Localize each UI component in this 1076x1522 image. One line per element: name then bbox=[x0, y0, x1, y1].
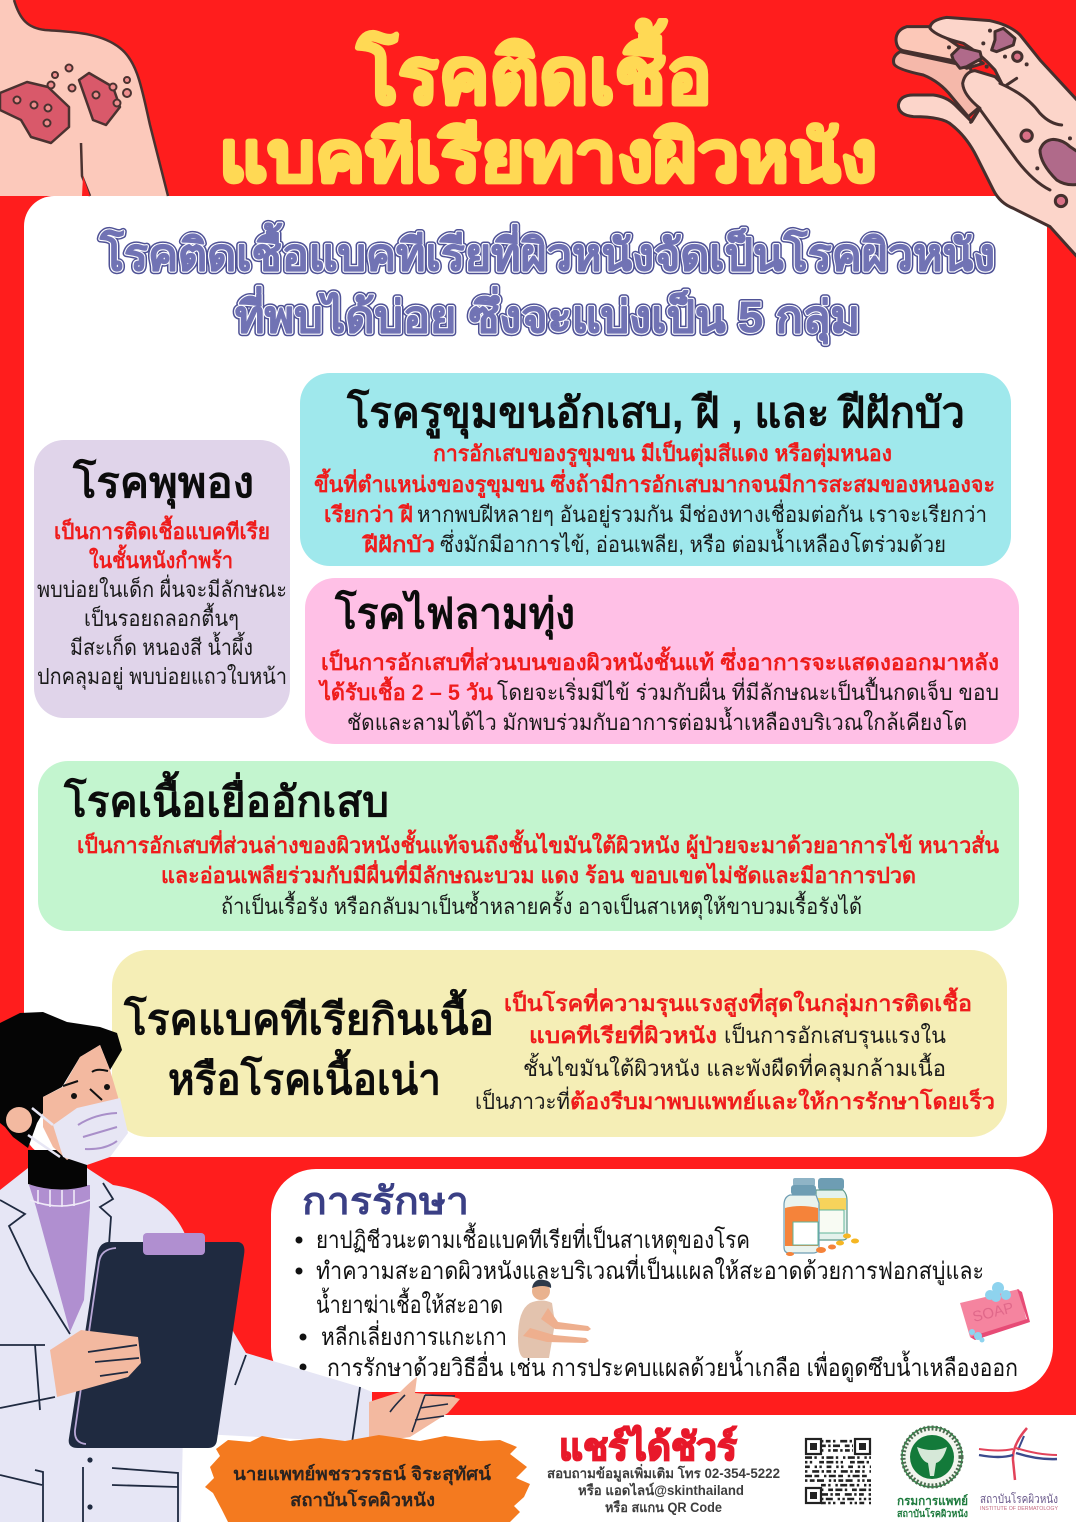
panel: necrotizing fasciitis: หรือโรคเนื้อเน่า bbox=[168, 1048, 441, 1103]
face mask bbox=[53, 1098, 128, 1165]
panel: treatment bbox=[271, 1169, 1053, 1392]
title bbox=[219, 19, 877, 196]
footer: share slogan and contact: สอบถามข้อมูลเพิ่มเติม โทร 02-354-5222 bbox=[547, 1463, 780, 1482]
subtitle: โรคติดเชื้อแบคทีเรียที่ผิวหนังจัดเป็นโรคผิวหนัง bbox=[99, 222, 995, 280]
banner: doctor name: นายแพทย์พชรวรรธน์ จิระสุทัศน์ bbox=[233, 1463, 492, 1486]
panel: erysipelas: ชัดและลามได้ไว มักพบร่วมกับอาการต่อมน้ำเหลืองบริเวณใกล้เคียงโต bbox=[347, 707, 967, 735]
doctor coat bbox=[0, 1168, 372, 1522]
sweater bbox=[29, 1185, 90, 1332]
coat buttons bbox=[87, 1457, 93, 1510]
panel: folliculitis and boils: หากพบฝีหลายๆ อันอยู่รวมกัน มีช่องทางเชื่อมต่อกัน เราจะเรียกว่า bbox=[417, 499, 987, 528]
logo: Institute of Dermatology: สถาบันโรคผิวหนัง bbox=[980, 1492, 1058, 1506]
panel: necrotizing fasciitis: ชั้นไขมันใต้ผิวหนัง และพังผืดที่คลุมกล้ามเนื้อ bbox=[523, 1053, 946, 1082]
subtitle: โรคติดเชื้อแบคทีเรียที่ผิวหนังจัดเป็นโรคผิวหนัง bbox=[99, 222, 995, 280]
title: โรคติดเชื้อ bbox=[356, 19, 712, 120]
subtitle: ที่พบได้บ่อย ซึ่งจะแบ่งเป็น 5 กลุ่ม bbox=[235, 286, 860, 345]
footer: share slogan and contact: หรือ สแกน QR Code bbox=[605, 1500, 722, 1515]
panel: erysipelas: โดยจะเริ่มมีไข้ ร่วมกับผื่น ที่มีลักษณะเป็นปื้นกดเจ็บ ขอบ bbox=[497, 677, 999, 705]
panel: erysipelas: โรคไฟลามทุ่ง bbox=[334, 589, 575, 640]
panel: necrotizing fasciitis: เป็นการอักเสบรุนแรงใน bbox=[724, 1021, 946, 1049]
title: แบคทีเรียทางผิวหนัง bbox=[219, 118, 877, 196]
illustration: hand with skin lesions bbox=[893, 17, 1076, 260]
holding hand bbox=[50, 1330, 141, 1397]
panel: folliculitis and boils: ฝีฝักบัว bbox=[361, 532, 435, 557]
panel: erysipelas: เป็นการอักเสบที่ส่วนบนของผิวหนังชั้นแท้ ซึ่งอาการจะแสดงออกมาหลัง bbox=[321, 646, 999, 675]
panel: necrotizing fasciitis: เป็นโรคที่ความรุนแรงสูงที่สุดในกลุ่มการติดเชื้อ bbox=[504, 987, 972, 1018]
footer white band bbox=[0, 1415, 1076, 1522]
panel: cellulitis: และอ่อนเพลียร่วมกับมีผื่นที่มีลักษณะบวม แดง ร้อน ขอบเขตไม่ชัดและมีอาการปวด bbox=[161, 859, 916, 888]
panel: folliculitis and boils: เรียกว่า ฝี bbox=[324, 502, 413, 527]
panel: necrotizing fasciitis: แบคทีเรียที่ผิวหนัง bbox=[529, 1019, 717, 1048]
panel: cellulitis bbox=[38, 761, 1019, 931]
panel: necrotizing fasciitis: เป็นภาวะที่ bbox=[475, 1086, 570, 1114]
treatment list bbox=[296, 1222, 1018, 1383]
panel: impetigo bbox=[34, 440, 290, 718]
subtitle: โรคติดเชื้อแบคทีเรียที่ผิวหนังจัดเป็นโรคผิวหนัง bbox=[99, 222, 995, 280]
illustration: shoulder with skin lesions bbox=[0, 0, 168, 196]
panel: impetigo: เป็นการติดเชื้อแบคทีเรีย bbox=[54, 515, 270, 544]
pointing hand bbox=[369, 1377, 460, 1443]
treatment list: ยาปฏิชีวนะตามเชื้อแบคทีเรียที่เป็นสาเหตุของโรค bbox=[316, 1222, 750, 1255]
clipboard bbox=[69, 1233, 244, 1448]
logo: Department of Medical Services: สถาบันโรคผิวหนัง bbox=[897, 1507, 968, 1520]
icon: man scratching skin bbox=[518, 1280, 591, 1358]
panel: impetigo: ในชั้นหนังกำพร้า bbox=[89, 544, 233, 573]
head bbox=[43, 1045, 123, 1160]
panel: impetigo: เป็นรอยถลอกตื้นๆ bbox=[84, 603, 239, 631]
icon: soap bar bbox=[960, 1282, 1030, 1342]
mask folds and facial detail bbox=[28, 1070, 117, 1157]
panel: folliculitis and boils: การอักเสบของรูขุมขน มีเป็นตุ่มสีแดง หรือตุ่มหนอง bbox=[433, 439, 892, 468]
subtitle: ที่พบได้บ่อย ซึ่งจะแบ่งเป็น 5 กลุ่ม bbox=[235, 286, 860, 345]
coat lapels bbox=[0, 1183, 360, 1522]
panel: necrotizing fasciitis: ต้องรีบมาพบแพทย์และให้การรักษาโดยเร็ว bbox=[570, 1087, 995, 1114]
logo: Department of Medical Services: กรมการแพทย์ bbox=[897, 1494, 968, 1508]
panel: cellulitis: โรคเนื้อเยื่ออักเสบ bbox=[63, 770, 389, 825]
icon: soap bar: SOAP bbox=[971, 1299, 1015, 1326]
treatment list: น้ำยาฆ่าเชื้อให้สะอาด bbox=[316, 1287, 503, 1319]
treatment list: ทำความสะอาดผิวหนังและบริเวณที่เป็นแผลให้สะอาดด้วยการฟอกสบู่และ bbox=[316, 1254, 984, 1286]
logo: Institute of Dermatology bbox=[979, 1428, 1059, 1512]
footer: share slogan and contact bbox=[547, 1425, 780, 1515]
banner: doctor name: สถาบันโรคผิวหนัง bbox=[290, 1489, 435, 1510]
hair bbox=[0, 1012, 122, 1148]
banner: doctor name bbox=[205, 1435, 530, 1522]
panel: erysipelas bbox=[305, 578, 1019, 744]
panel: erysipelas: ได้รับเชื้อ 2 – 5 วัน bbox=[318, 676, 493, 705]
illustration: doctor with face mask and clipboard bbox=[0, 1012, 460, 1522]
icon: medicine bottles bbox=[784, 1178, 859, 1256]
treatment heading: การรักษา bbox=[302, 1181, 469, 1223]
logo: Department of Medical Services bbox=[897, 1427, 968, 1520]
neck bbox=[28, 1150, 87, 1190]
panel: main white card bbox=[24, 196, 1047, 1157]
subtitle bbox=[99, 222, 995, 345]
panel: folliculitis and boils: ขึ้นที่ตำแหน่งของรูขุมขน ซึ่งถ้ามีการอักเสบมากจนมีการสะสมของหนองจะ bbox=[314, 468, 995, 499]
panel: folliculitis and boils: ซึ่งมักมีอาการไข้, อ่อนเพลีย, หรือ ต่อมน้ำเหลืองโตร่วมด้วย bbox=[440, 529, 946, 557]
panel: necrotizing fasciitis bbox=[112, 950, 1007, 1137]
panel: impetigo: มีสะเก็ด หนองสี น้ำผึ้ง bbox=[70, 632, 253, 660]
footer: share slogan and contact: แชร์ได้ชัวร์ bbox=[559, 1425, 738, 1469]
panel: impetigo: ปกคลุมอยู่ พบบ่อยแถวใบหน้า bbox=[37, 664, 287, 690]
subtitle: ที่พบได้บ่อย ซึ่งจะแบ่งเป็น 5 กลุ่ม bbox=[235, 286, 860, 345]
panel: impetigo: โรคพุพอง bbox=[72, 458, 254, 509]
footer: share slogan and contact: หรือ แอดไลน์@skinthailand bbox=[578, 1482, 744, 1498]
logo: Institute of Dermatology: INSTITUTE OF DERMATOLOGY bbox=[980, 1506, 1059, 1512]
panel: folliculitis and boils: โรครูขุมขนอักเสบ, ฝี , และ ฝีฝักบัว bbox=[346, 388, 965, 439]
treatment list: หลีกเลี่ยงการแกะเกา bbox=[321, 1320, 507, 1351]
icon: QR code bbox=[805, 1439, 871, 1503]
panel: folliculitis and boils bbox=[300, 373, 1011, 566]
panel: impetigo: พบบ่อยในเด็ก ผื่นจะมีลักษณะ bbox=[37, 574, 287, 602]
panel: cellulitis: ถ้าเป็นเรื้อรัง หรือกลับมาเป็นซ้ำหลายครั้ง อาจเป็นสาเหตุให้ขาบวมเรื้อรังได้ bbox=[221, 891, 862, 920]
panel: necrotizing fasciitis: โรคแบคทีเรียกินเนื้อ bbox=[123, 988, 494, 1043]
panel: cellulitis: เป็นการอักเสบที่ส่วนล่างของผิวหนังชั้นแท้จนถึงชั้นไขมันใต้ผิวหนัง ผู้ป่วยจะมาด้วยอาการไข้ หนาวสั่น bbox=[77, 829, 999, 860]
